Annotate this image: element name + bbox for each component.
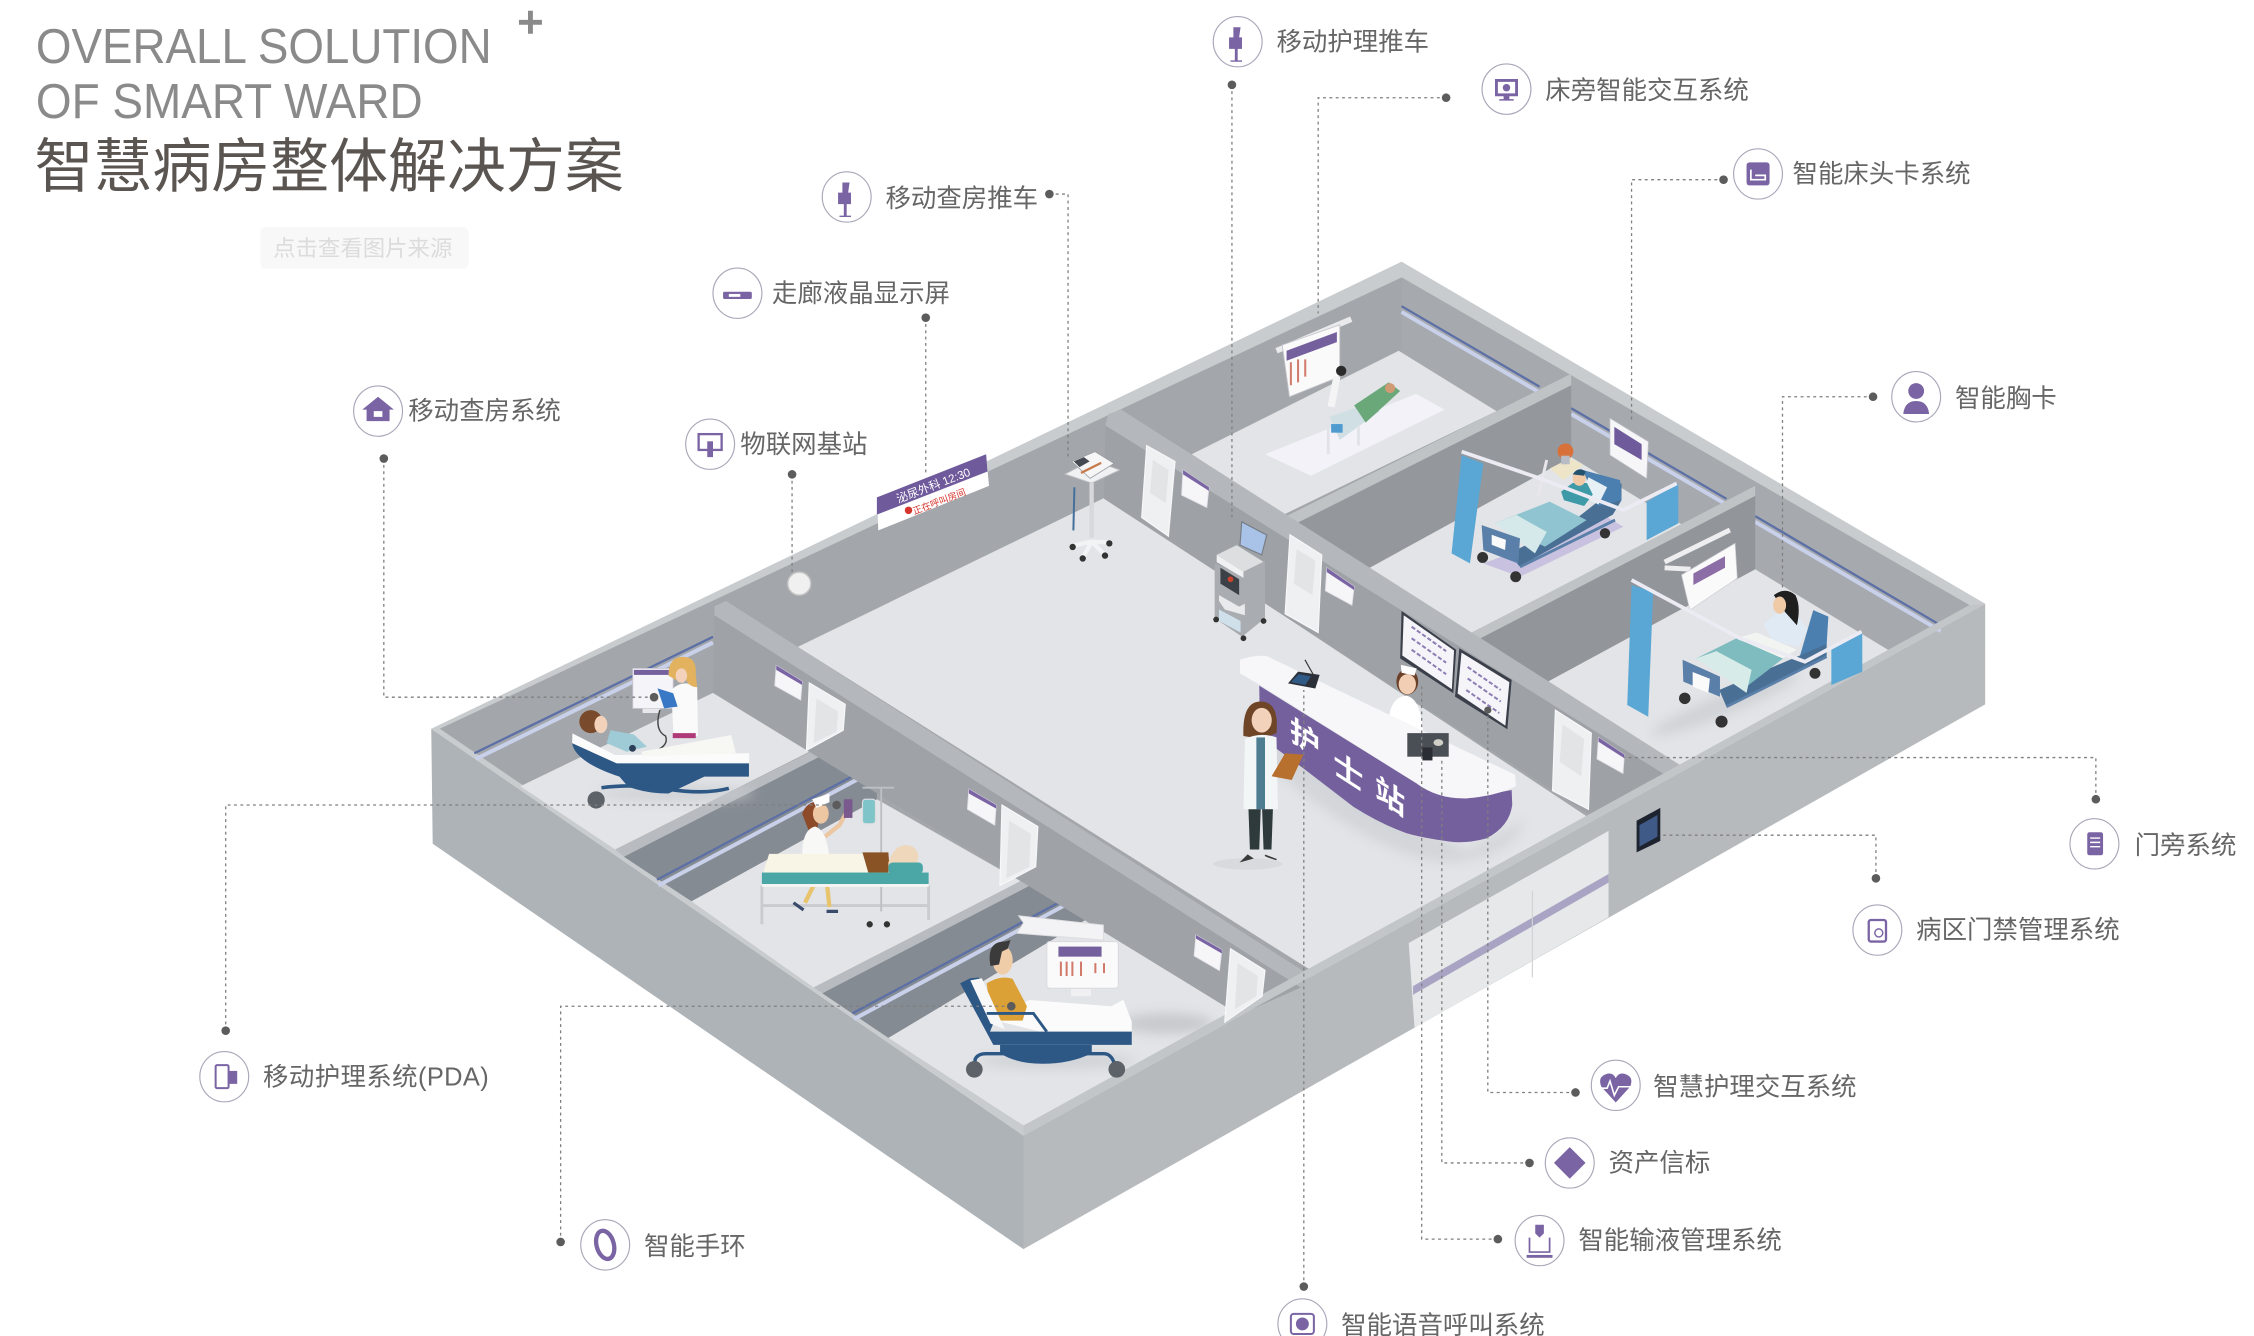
bed head	[1800, 610, 1828, 657]
doctor	[671, 683, 698, 736]
wall rim	[431, 262, 1985, 1136]
entrance door panel	[1409, 831, 1609, 1028]
corridor banner display	[877, 454, 989, 530]
label: mobile rounds system: 移动查房系统	[408, 398, 561, 426]
room C: reclining chair with patient	[960, 916, 1213, 1078]
label: bedside interactive system: 床旁智能交互系统	[1545, 77, 1749, 105]
label: smart nursing interaction	[1591, 1060, 1857, 1110]
outer right wall	[1024, 604, 1985, 1249]
sheet	[990, 1000, 1132, 1032]
wall stripes	[474, 306, 1941, 759]
room 2: hospital bed with curtains	[1452, 418, 1678, 582]
label: IoT base station	[686, 419, 868, 469]
room 1: bed with monitor arm	[1265, 319, 1445, 476]
label: smart badge: 智能胸卡	[1955, 385, 2057, 413]
nurse station counter	[1240, 656, 1524, 862]
patient	[607, 730, 647, 752]
room B: bed with nurse	[762, 788, 929, 927]
bed	[1719, 644, 1827, 707]
plus sign	[519, 11, 542, 34]
mattress and patient	[763, 854, 868, 873]
label: door-side system	[2070, 819, 2236, 869]
nurse	[802, 802, 822, 839]
label: ward access control: 病区门禁管理系统	[1916, 917, 2120, 945]
front wall rim over corridor	[1024, 604, 1985, 1136]
label: smart badge	[1892, 372, 2057, 422]
title block	[35, 11, 624, 200]
english title line 1: OVERALL SOLUTION	[36, 20, 492, 74]
label: asset beacon	[1545, 1138, 1710, 1188]
floors	[520, 351, 1890, 1126]
doctor figure	[1213, 701, 1303, 870]
chinese title: 智慧病房整体解决方案	[35, 135, 624, 200]
label: corridor LCD	[713, 268, 950, 318]
mobile rounds cart with printer	[1065, 452, 1119, 562]
corridor banner display: 泌尿外科 12:30	[894, 465, 972, 506]
callout leader lines	[221, 80, 2100, 1291]
label: asset beacon: 资产信标	[1609, 1150, 1710, 1178]
counter phone	[1288, 660, 1320, 689]
label: mobile nursing PDA	[200, 1052, 489, 1102]
label: mobile rounds system	[354, 386, 561, 436]
IoT base station	[788, 572, 811, 595]
wall unit	[1610, 418, 1648, 478]
bed frame	[762, 885, 929, 924]
patient	[1763, 612, 1808, 647]
outer left wall	[431, 729, 1024, 1249]
label: smart nursing interaction: 智慧护理交互系统	[1653, 1073, 1857, 1101]
access control tablet	[1637, 808, 1660, 852]
english title line 2: OF SMART WARD	[36, 75, 423, 129]
label: smart bedhead card: 智能床头卡系统	[1793, 161, 1971, 189]
corridor walls	[713, 410, 1682, 1015]
room 3: hospital bed with curtains	[1627, 530, 1862, 743]
bed	[1483, 517, 1623, 577]
mobile nursing cart	[1213, 522, 1267, 641]
label: mobile rounds cart: 移动查房推车	[886, 185, 1038, 213]
bed	[572, 743, 749, 793]
label: door-side system: 门旁系统	[2135, 832, 2236, 860]
label: corridor LCD: 走廊液晶显示屏	[772, 280, 950, 308]
label: smart infusion	[1515, 1215, 1782, 1266]
label: smart bedhead card	[1734, 149, 1971, 199]
label: smart infusion: 智能输液管理系统	[1578, 1227, 1782, 1255]
station sign text: 站	[1375, 771, 1405, 824]
label: IoT base station: 物联网基站	[740, 431, 868, 459]
corridor banner display: 正在呼叫房间	[911, 486, 967, 516]
patient	[1561, 483, 1593, 506]
source button: 点击查看图片来源	[273, 236, 452, 261]
monitor	[633, 668, 673, 708]
counter monitor	[1407, 733, 1449, 760]
label: ward access control	[1853, 905, 2120, 955]
IV pole	[863, 788, 894, 911]
wall monitor	[1665, 530, 1730, 562]
source button	[260, 227, 469, 269]
label: smart wristband: 智能手环	[644, 1233, 746, 1261]
label: smart wristband	[581, 1220, 746, 1270]
patient	[987, 977, 1027, 1021]
station sign text	[1290, 713, 1405, 824]
nurse at station	[1389, 665, 1423, 732]
station sign text: 士	[1333, 746, 1363, 799]
room partition walls	[615, 374, 1755, 1038]
label: mobile rounds cart	[822, 172, 1038, 222]
room A: patient bed with doctor	[572, 657, 755, 809]
station sign text: 护	[1290, 713, 1320, 766]
label: bedside interactive system	[1482, 64, 1749, 114]
bedside table, drip and flowers	[1538, 460, 1547, 496]
curtain rail	[1632, 580, 1862, 662]
arm and monitor	[1017, 916, 1103, 940]
label: mobile nursing cart: 移动护理推车	[1276, 28, 1429, 56]
chair	[960, 977, 1132, 1045]
ward displays on wall	[1400, 611, 1512, 729]
interior walls	[440, 277, 1969, 1126]
label: mobile nursing cart	[1213, 17, 1429, 67]
label: smart voice call	[1278, 1299, 1545, 1336]
label: mobile nursing PDA: 移动护理系统(PDA)	[263, 1063, 489, 1091]
building floor plan	[431, 262, 1985, 1249]
doors and wall signs	[775, 446, 1624, 1022]
curtain rail	[1462, 452, 1677, 510]
